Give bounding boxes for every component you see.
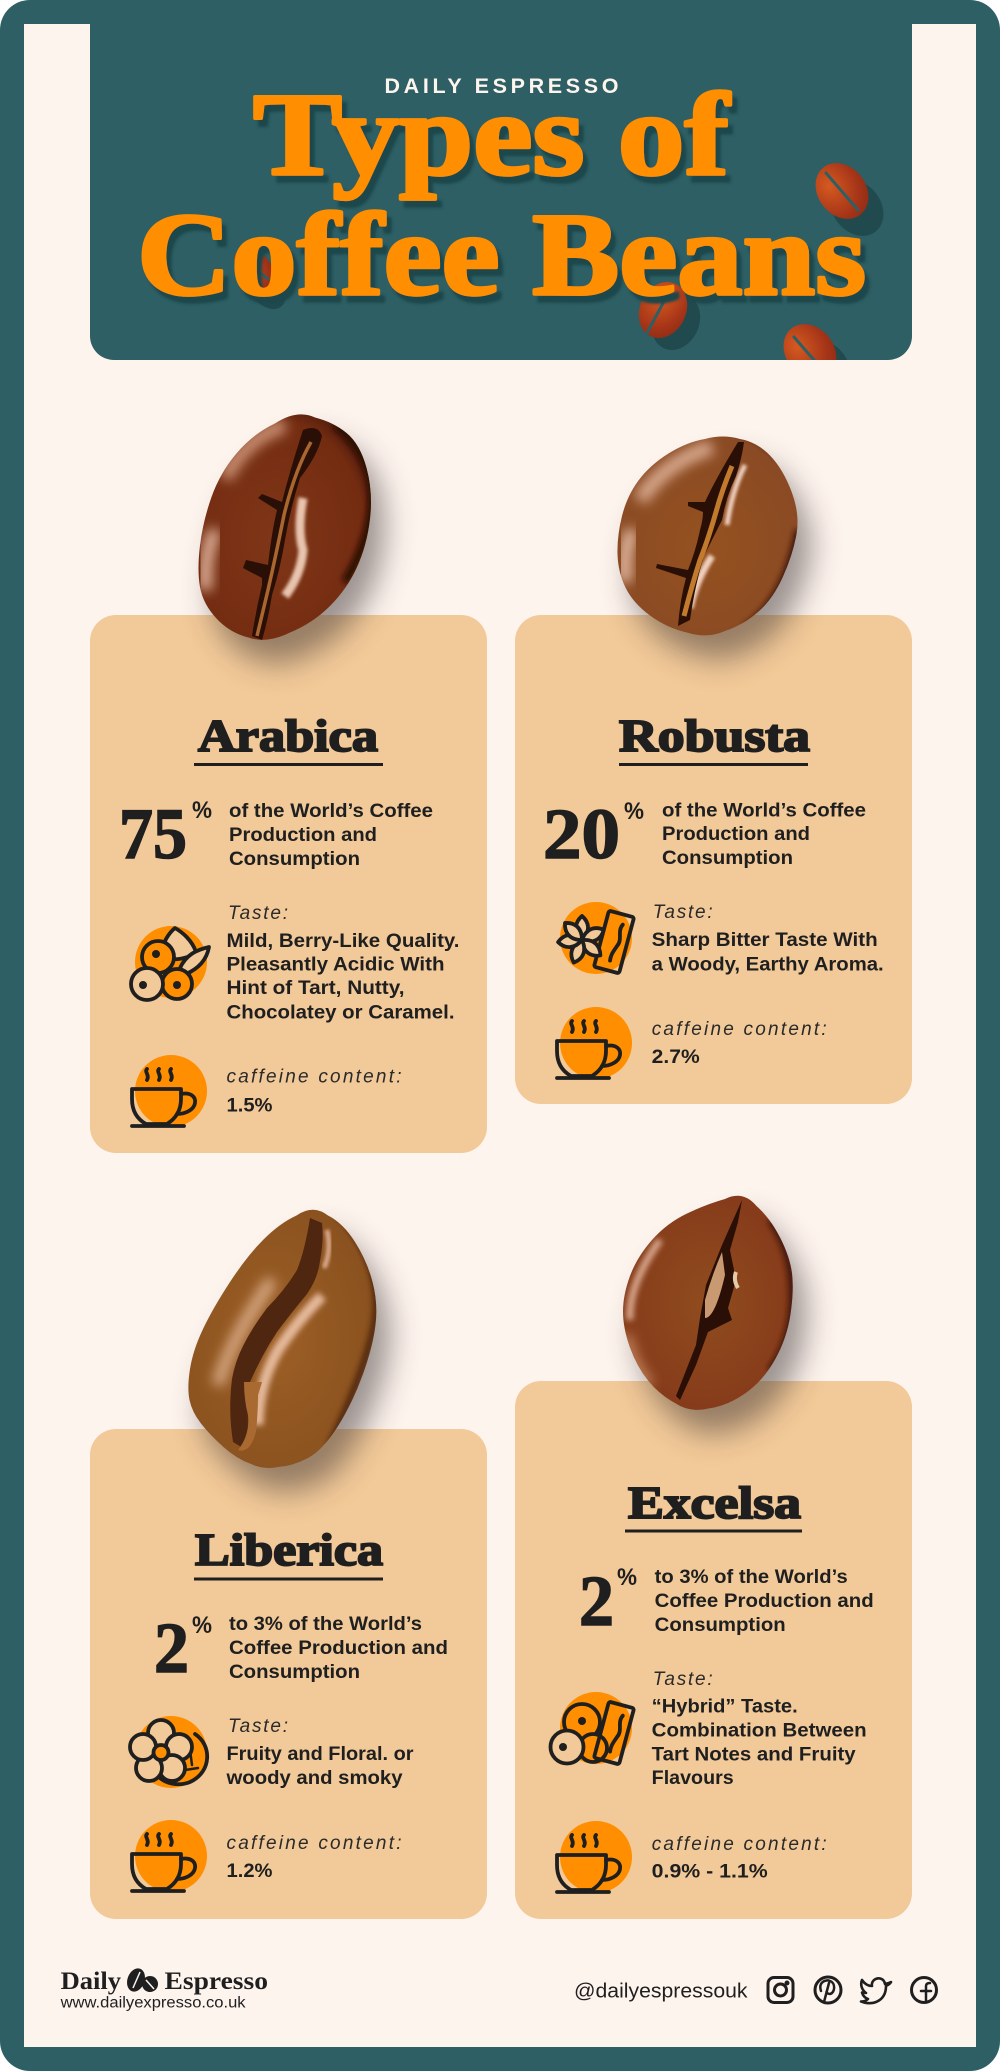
icon: coffee cup bbox=[557, 1007, 632, 1079]
icon: instagram bbox=[768, 1978, 793, 2002]
taste text: Hint of Tart, Nutty, bbox=[226, 977, 404, 999]
production text: Consumption bbox=[229, 1661, 360, 1683]
stat: 2% bbox=[579, 1561, 637, 1641]
taste text: Combination Between bbox=[652, 1720, 867, 1742]
caffeine text: 1.2% bbox=[226, 1860, 272, 1882]
production text: Production and bbox=[229, 824, 377, 846]
heading: Robusta bbox=[619, 710, 810, 761]
taste text: Taste: bbox=[228, 903, 288, 924]
panel: Robusta bbox=[515, 436, 912, 1104]
stat: 20%: 20 bbox=[543, 794, 620, 874]
production text: of the World’s Coffee bbox=[229, 800, 433, 822]
production text: Consumption bbox=[655, 1614, 786, 1636]
stat: 2%: 2 bbox=[154, 1608, 189, 1688]
taste text: Fruity and Floral. or bbox=[226, 1743, 414, 1765]
panel: Arabica bbox=[90, 414, 487, 1153]
bean illustration: Excelsa bbox=[623, 1196, 807, 1434]
caffeine text: 2.7% bbox=[652, 1046, 700, 1068]
taste text: a Woody, Earthy Aroma. bbox=[652, 953, 884, 975]
caffeine text: 0.9% - 1.1% bbox=[652, 1861, 768, 1883]
icon: pinterest bbox=[815, 1977, 841, 2003]
title bbox=[137, 69, 866, 320]
icon: flower and citrus bbox=[130, 1716, 207, 1788]
icon: coffee cup bbox=[132, 1820, 207, 1892]
icon: star anise and cinnamon bbox=[558, 902, 634, 974]
stat: 2% bbox=[154, 1608, 212, 1688]
icon: twitter bbox=[861, 1978, 891, 2003]
title: Coffee Beans bbox=[137, 189, 866, 320]
caffeine text: caffeine content: bbox=[226, 1833, 402, 1854]
caffeine text: 1.5% bbox=[226, 1094, 272, 1116]
caffeine text: caffeine content: bbox=[226, 1066, 402, 1088]
production text bbox=[655, 1566, 874, 1636]
caffeine text: caffeine content: bbox=[652, 1019, 827, 1040]
bean illustration: Arabica bbox=[198, 414, 385, 664]
caffeine text bbox=[652, 1834, 827, 1883]
panel: Excelsa bbox=[515, 1196, 912, 1919]
icon: berries and leaves bbox=[131, 926, 209, 1000]
production text: Consumption bbox=[229, 848, 360, 870]
stat: 75%: % bbox=[192, 797, 212, 824]
taste text: Pleasantly Acidic With bbox=[226, 954, 444, 976]
caffeine text: caffeine content: bbox=[652, 1834, 827, 1855]
production text: to 3% of the World’s bbox=[229, 1613, 422, 1635]
production text: to 3% of the World’s bbox=[655, 1566, 848, 1588]
caffeine text bbox=[226, 1066, 402, 1116]
header banner bbox=[90, 0, 912, 406]
taste text: “Hybrid” Taste. bbox=[652, 1696, 798, 1718]
caffeine text bbox=[226, 1833, 402, 1882]
footer logo bbox=[60, 1966, 268, 2012]
footer logo: www.dailyexpresso.co.uk bbox=[60, 1995, 246, 2012]
production text bbox=[229, 800, 433, 870]
icon: coffee cup bbox=[132, 1055, 207, 1127]
stat: 2%: % bbox=[617, 1564, 637, 1591]
taste text: Tart Notes and Fruity bbox=[652, 1743, 856, 1765]
heading: Excelsa bbox=[628, 1477, 801, 1528]
taste text bbox=[225, 1716, 414, 1789]
production text: Consumption bbox=[662, 847, 793, 869]
title: Types of bbox=[253, 69, 731, 200]
icon: logo beans bbox=[124, 1966, 161, 1995]
taste text: Taste: bbox=[653, 1669, 713, 1690]
production text: Production and bbox=[662, 823, 810, 845]
footer logo: Espresso bbox=[164, 1968, 268, 1995]
subtitle: DAILY ESPRESSO bbox=[384, 74, 618, 98]
caffeine text bbox=[652, 1019, 827, 1068]
production text: of the World’s Coffee bbox=[662, 800, 866, 822]
taste text bbox=[226, 903, 460, 1024]
heading: Liberica bbox=[195, 1524, 383, 1575]
bean illustration: Robusta bbox=[617, 436, 812, 659]
stat: 2%: 2 bbox=[579, 1561, 614, 1641]
taste text bbox=[652, 902, 884, 975]
production text: Coffee Production and bbox=[655, 1590, 874, 1612]
production text bbox=[229, 1613, 448, 1683]
production text: Coffee Production and bbox=[229, 1637, 448, 1659]
taste text: woody and smoky bbox=[225, 1767, 403, 1789]
icon: coffee cup bbox=[557, 1821, 632, 1893]
taste text: Taste: bbox=[653, 902, 713, 923]
taste text: Flavours bbox=[652, 1767, 734, 1789]
icon: facebook bbox=[912, 1978, 936, 2002]
production text bbox=[662, 800, 866, 869]
social handle: @dailyespressouk bbox=[574, 1981, 749, 2003]
taste text: Taste: bbox=[228, 1716, 288, 1737]
taste text: Sharp Bitter Taste With bbox=[652, 929, 878, 951]
panel: Liberica bbox=[90, 1210, 487, 1919]
footer logo: Daily bbox=[61, 1968, 122, 1995]
stat: 20%: % bbox=[624, 798, 644, 825]
decorative falling beans bbox=[226, 153, 894, 406]
heading: Arabica bbox=[198, 710, 378, 761]
icon: berries and cinnamon bbox=[550, 1692, 634, 1764]
bean illustration: Liberica bbox=[188, 1210, 390, 1492]
taste text bbox=[652, 1669, 867, 1789]
stat: 2%: % bbox=[192, 1612, 212, 1639]
taste text: Chocolatey or Caramel. bbox=[226, 1002, 454, 1024]
stat: 75%: 75 bbox=[119, 794, 187, 874]
taste text: Mild, Berry-Like Quality. bbox=[226, 930, 460, 952]
